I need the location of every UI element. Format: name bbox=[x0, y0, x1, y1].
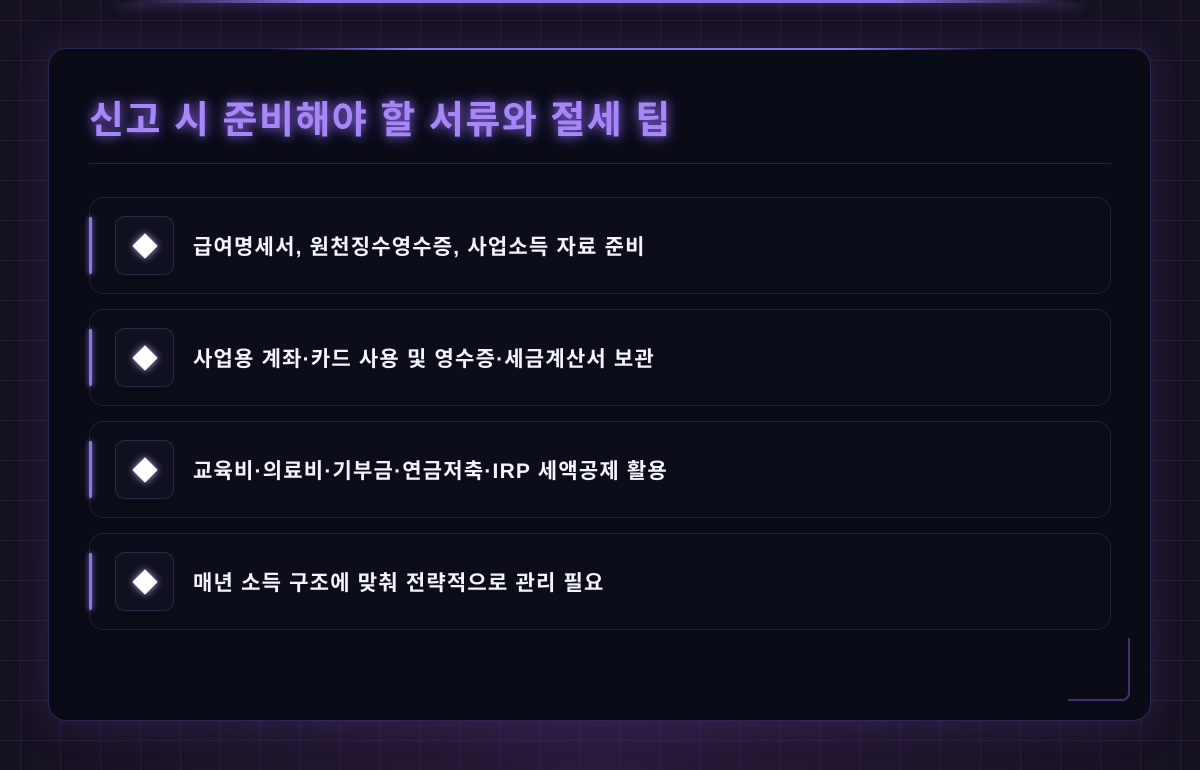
corner accent bbox=[1068, 638, 1130, 701]
text 4: 매년 소득 구조에 맞춰 전략적으로 관리 필요 bbox=[193, 572, 605, 595]
icon: diamond bbox=[115, 216, 174, 275]
icon: diamond bbox=[115, 440, 174, 499]
text 1: 급여명세서, 원천징수영수증, 사업소득 자료 준비 bbox=[193, 236, 646, 259]
icon: diamond bbox=[115, 552, 174, 611]
item 1 bbox=[89, 197, 1111, 294]
text 3: 교육비·의료비·기부금·연금저축·IRP 세액공제 활용 bbox=[193, 460, 668, 483]
item 3 bbox=[89, 421, 1111, 518]
text 2: 사업용 계좌·카드 사용 및 영수증·세금계산서 보관 bbox=[193, 348, 655, 371]
icon: diamond bbox=[115, 328, 174, 387]
item 4 bbox=[89, 533, 1111, 630]
title: 신고 시 준비해야 할 서류와 절세 팁 bbox=[89, 100, 672, 142]
item 2 bbox=[89, 309, 1111, 406]
